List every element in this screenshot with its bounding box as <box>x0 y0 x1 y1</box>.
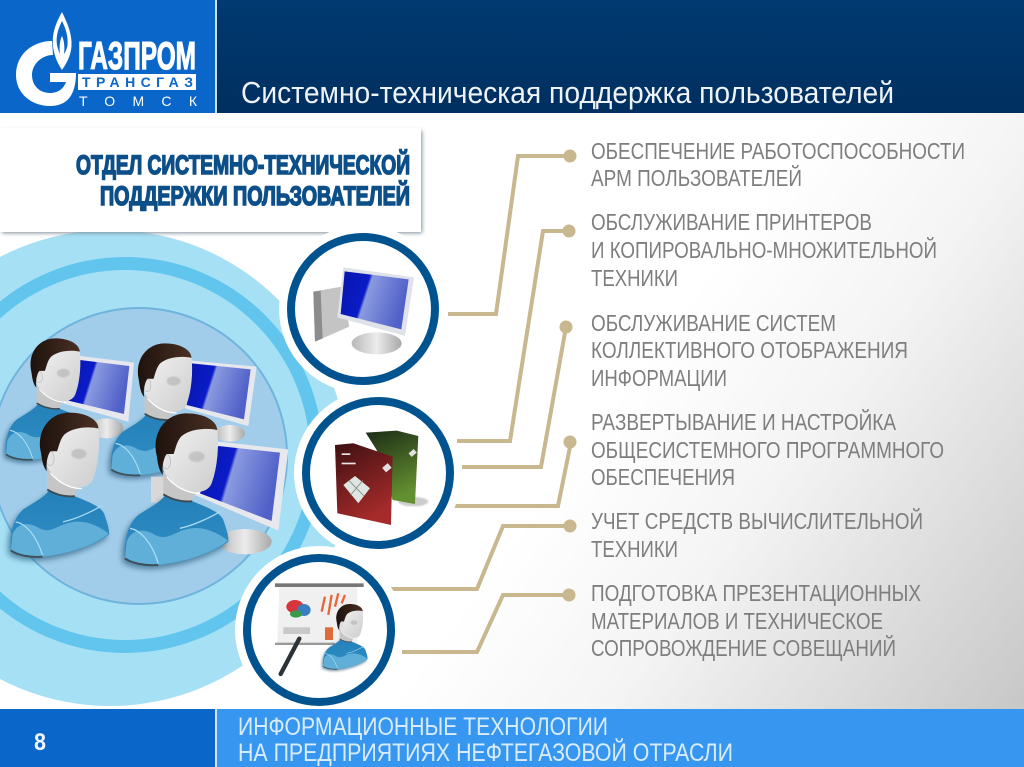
item 4 <box>591 408 944 490</box>
item 1: АРМ ПОЛЬЗОВАТЕЛЕЙ <box>591 164 802 191</box>
user 1 <box>4 338 89 463</box>
item 6: ПОДГОТОВКА ПРЕЗЕНТАЦИОННЫХ <box>591 580 921 606</box>
department heading: ПОДДЕРЖКИ ПОЛЬЗОВАТЕЛЕЙ <box>100 180 410 211</box>
logo: Gazprom Transgaz Tomsk <box>16 12 198 109</box>
item 3: КОЛЛЕКТИВНОГО ОТОБРАЖЕНИЯ <box>591 337 908 363</box>
logo city: ТОМСК <box>79 93 198 109</box>
item 6: СОПРОВОЖДЕНИЕ СОВЕЩАНИЙ <box>591 634 896 661</box>
service list <box>591 138 965 661</box>
footer bar <box>0 709 1024 767</box>
footer caption <box>238 713 733 767</box>
monitor 1 <box>63 356 134 438</box>
badge: software boxes <box>294 389 462 557</box>
logo subline: ТРАНСГАЗ <box>82 74 193 90</box>
icon: gas flame and G emblem <box>16 12 76 106</box>
item 5: ТЕХНИКИ <box>591 536 678 562</box>
item 4: ОБЩЕСИСТЕМНОГО ПРОГРАММНОГО <box>591 437 944 463</box>
user 4 <box>122 413 228 569</box>
group of users at computers <box>4 338 288 569</box>
connector dots <box>560 150 576 602</box>
footer caption: ИНФОРМАЦИОННЫЕ ТЕХНОЛОГИИ <box>238 713 608 741</box>
title: Системно-техническая поддержка пользователей <box>241 75 894 110</box>
monitor 3 <box>195 442 288 554</box>
badge: computer <box>279 225 447 393</box>
item 3: ОБСЛУЖИВАНИЕ СИСТЕМ <box>591 310 836 336</box>
logo wordmark: ГАЗПРОМ <box>78 35 196 78</box>
item 5 <box>591 507 923 562</box>
monitor 2 <box>185 361 257 442</box>
item 6 <box>591 580 921 661</box>
item 2: ОБСЛУЖИВАНИЕ ПРИНТЕРОВ <box>591 209 872 235</box>
item 1 <box>591 138 965 191</box>
item 2 <box>591 209 937 291</box>
item 4: ОБЕСПЕЧЕНИЯ <box>591 464 735 490</box>
header bar <box>0 0 1024 113</box>
item 6: МАТЕРИАЛОВ И ТЕХНИЧЕСКОЕ <box>591 608 883 634</box>
item 4: РАЗВЕРТЫВАНИЕ И НАСТРОЙКА <box>591 408 897 435</box>
user 3 <box>8 413 109 561</box>
department heading <box>76 149 410 211</box>
background concentric circles <box>0 230 348 706</box>
item 3: ИНФОРМАЦИИ <box>591 365 727 391</box>
department panel <box>0 128 422 233</box>
footer caption: НА ПРЕДПРИЯТИЯХ НЕФТЕГАЗОВОЙ ОТРАСЛИ <box>238 737 733 767</box>
page number: 8 <box>34 729 46 756</box>
badge: presentation <box>235 546 403 714</box>
item 2: ТЕХНИКИ <box>591 265 678 291</box>
item 3 <box>591 310 908 391</box>
item 5: УЧЕТ СРЕДСТВ ВЫЧИСЛИТЕЛЬНОЙ <box>591 507 923 534</box>
user 2 <box>109 343 201 479</box>
department heading: ОТДЕЛ СИСТЕМНО-ТЕХНИЧЕСКОЙ <box>76 149 410 180</box>
item 2: И КОПИРОВАЛЬНО-МНОЖИТЕЛЬНОЙ <box>591 236 937 263</box>
computer tower <box>151 477 164 503</box>
connector lines <box>391 156 571 652</box>
